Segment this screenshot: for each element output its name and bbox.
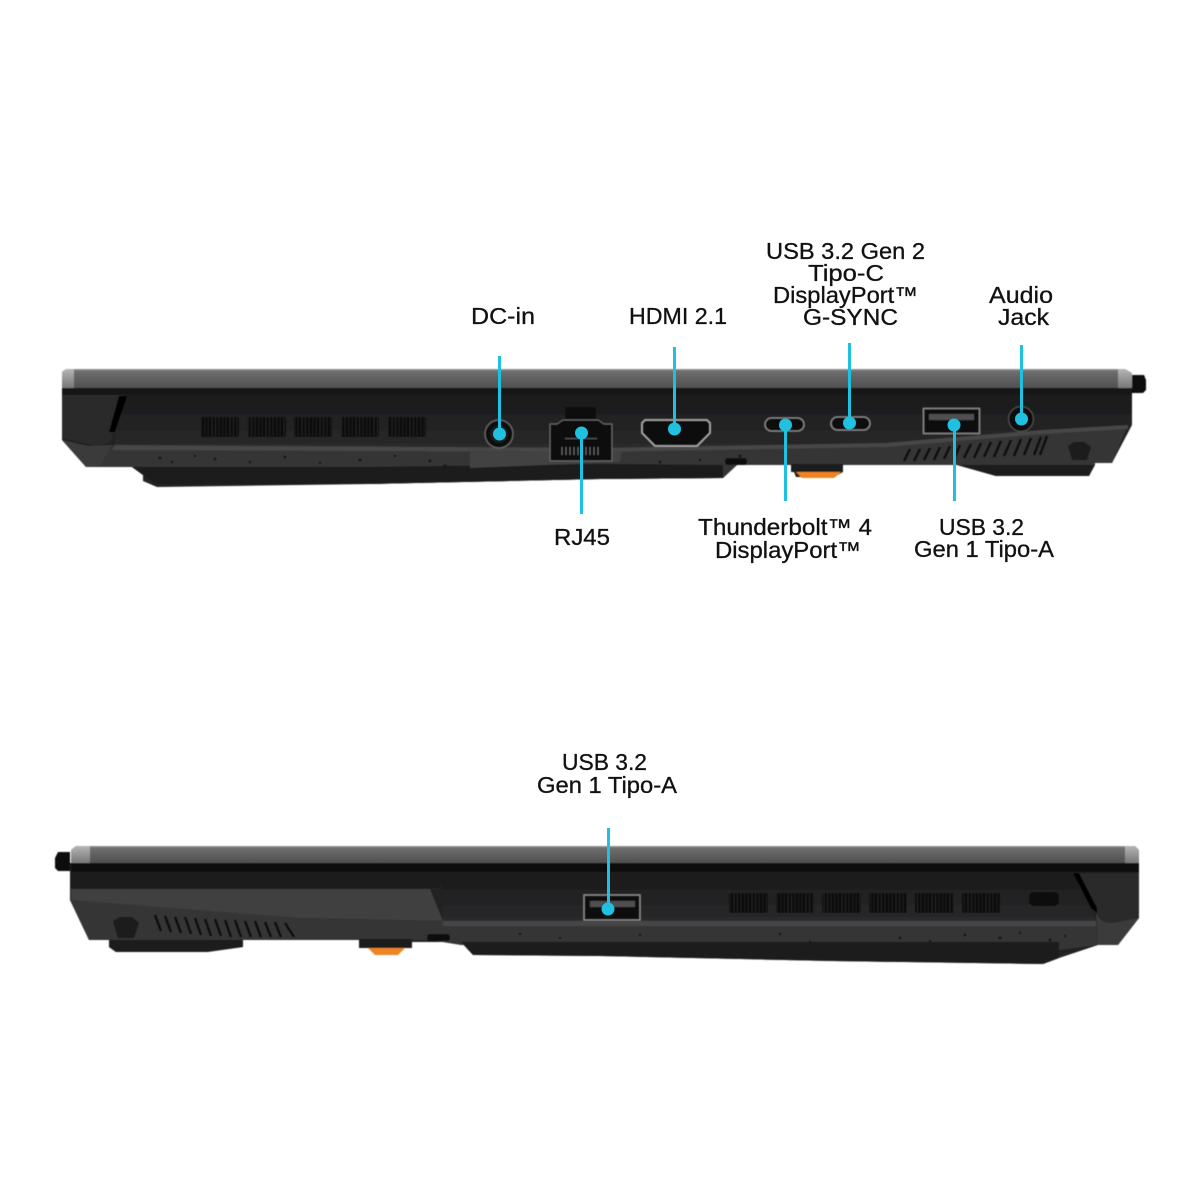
callout: RJ45: RJ45 [554, 524, 610, 550]
callout: Audio Jack: Jack [998, 304, 1050, 330]
callout: USB 3.2 Gen 1 Type-A: USB 3.2 [939, 514, 1024, 540]
callout: USB 3.2 Gen 2 Type-C: USB 3.2 Gen 2 [766, 238, 925, 264]
left foot [109, 940, 243, 952]
speckles [159, 455, 741, 468]
orange foot [796, 472, 841, 478]
slanted vent [155, 915, 294, 937]
laptop: bottom view with right-side ports [55, 846, 1139, 964]
callout: USB 3.2 Gen 1 Type-A: Gen 1 Tipo-A [914, 536, 1055, 562]
callout: Thunderbolt 4: DisplayPort™ [715, 537, 861, 563]
rubber foot [113, 917, 139, 938]
orange foot [368, 948, 405, 955]
callout: RJ45 [554, 426, 610, 550]
callout: DC-in [471, 303, 535, 440]
rubber foot [1068, 442, 1091, 460]
right block [1073, 873, 1139, 924]
hinge tab [1132, 375, 1146, 393]
callout: bottom USB 3.2 Gen 1 Type-A: Gen 1 Tipo-A [537, 772, 678, 798]
callout: Audio Jack: Audio [989, 282, 1053, 308]
callout: bottom USB 3.2 Gen 1 Type-A [537, 749, 678, 916]
slanted vent [904, 436, 1047, 461]
lid [62, 369, 1132, 388]
RJ45 port [550, 407, 612, 461]
side panel [440, 873, 1096, 921]
laptop body [70, 863, 1139, 964]
callout: HDMI 2.1 [629, 303, 727, 436]
right foot [957, 465, 1095, 476]
callout: DC-in: DC-in [471, 303, 535, 329]
lower speckled strip [100, 425, 1128, 484]
callout: USB 3.2 Gen 2 Type-C: Tipo-C [808, 260, 884, 286]
USB-C port [831, 417, 870, 430]
callout: USB 3.2 Gen 2 Type-C [766, 238, 925, 430]
vents [729, 893, 1000, 913]
side panel [115, 396, 1132, 448]
Thunderbolt USB-C port [765, 418, 804, 431]
callout: USB 3.2 Gen 1 Type-A [914, 418, 1055, 562]
DC-in port [485, 420, 513, 448]
callout: USB 3.2 Gen 2 Type-C: DisplayPort™ [773, 282, 918, 308]
audio jack [1008, 406, 1034, 432]
hinge tab [55, 852, 70, 871]
callout: bottom USB 3.2 Gen 1 Type-A: USB 3.2 [562, 749, 647, 775]
callout: Audio Jack [989, 282, 1053, 426]
callout: Thunderbolt 4 [698, 418, 872, 563]
USB-A port [924, 408, 980, 434]
callout: Thunderbolt 4: Thunderbolt™ 4 [698, 514, 872, 540]
USB-A port [584, 895, 640, 920]
vents [201, 417, 426, 437]
laptop: top view with left-side ports [62, 369, 1146, 487]
laptop body [62, 388, 1132, 487]
speckles [519, 932, 1066, 943]
lower speckled strip [70, 900, 1098, 950]
callout: HDMI 2.1: HDMI 2.1 [629, 303, 727, 329]
HDMI port [642, 420, 710, 446]
lock slot [1029, 892, 1059, 906]
lid [71, 846, 1139, 863]
grey accent panel [71, 889, 443, 921]
callout: USB 3.2 Gen 2 Type-C: G-SYNC [803, 304, 898, 330]
